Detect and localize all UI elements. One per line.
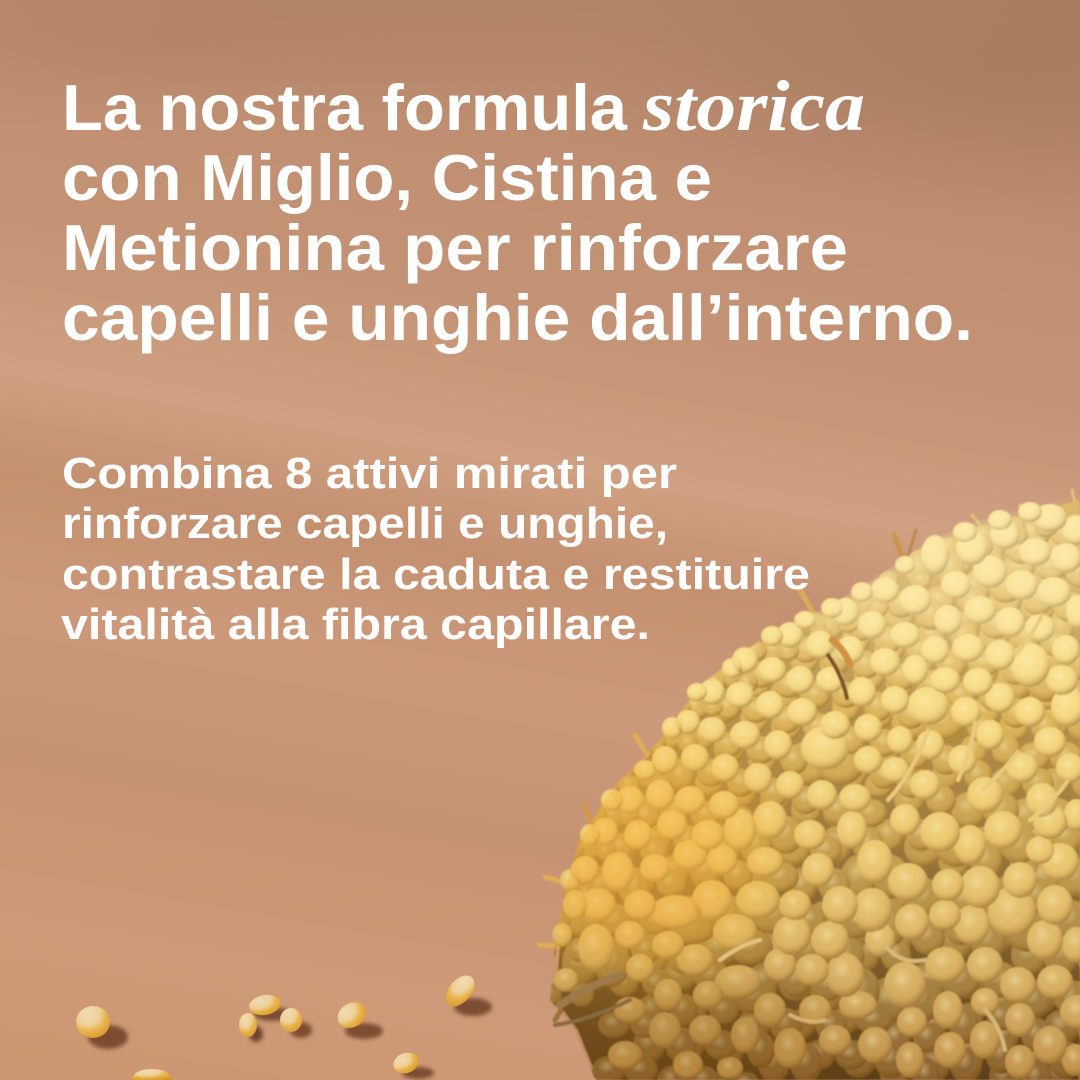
loose millet seeds on the surface (76, 970, 492, 1080)
millet grains (552, 502, 1080, 1079)
subtitle text block (61, 449, 810, 649)
mound base (556, 500, 1080, 1080)
title line 3: Metionina per rinforzare (62, 211, 848, 284)
title line 1 (62, 66, 865, 146)
title line 2: con Miglio, Cistina e (62, 141, 712, 214)
grain shading (552, 502, 1080, 1079)
subtitle text block: contrastare la caduta e restituire (62, 550, 810, 599)
seed at bottom edge (132, 1069, 172, 1080)
seed with shadow (76, 1006, 128, 1049)
underlying grain layers filling gaps (536, 517, 1080, 1080)
tonal tints over the mound (510, 510, 1080, 1075)
seed with shadow (390, 1049, 434, 1079)
seed with shadow (333, 997, 383, 1039)
millet mound photo illustration (510, 490, 1080, 1080)
outer sprouts (540, 490, 1078, 1020)
title (62, 66, 973, 354)
subtitle text block: rinforzare capelli e unghie, (62, 499, 668, 548)
seed cluster (239, 992, 312, 1042)
title line 4: capelli e unghie dall’interno. (62, 281, 973, 354)
inner sprouts (555, 615, 1067, 1050)
seed with shadow (440, 970, 492, 1016)
subtitle text block: Combina 8 attivi mirati per (62, 449, 677, 498)
subtitle text block: vitalità alla fibra capillare. (61, 600, 650, 649)
title line 1: storica (642, 66, 865, 146)
title line 1: La nostra formula (62, 71, 628, 144)
